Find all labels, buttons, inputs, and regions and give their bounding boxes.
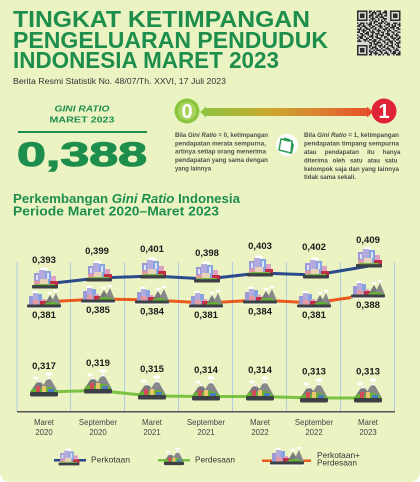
legend item: perdesaan: Perdesaan xyxy=(195,456,235,464)
text block: gini ratio = 0: yang lainnya xyxy=(175,166,212,172)
values: perdesaan: 0,314 xyxy=(194,365,219,376)
arrow: gradient scale xyxy=(200,106,373,118)
text block: gini ratio = 1: tidak sama sekali. xyxy=(304,174,356,181)
x axis labels: September xyxy=(79,418,117,427)
x axis labels: 2021 xyxy=(197,428,215,437)
values: perkotaan: 0,409 xyxy=(356,235,380,246)
text block: gini ratio = 1: diterima oleh satu atau satu xyxy=(304,158,398,164)
icons: perkotaan markers xyxy=(32,246,382,288)
label: gini ratio period: GINI RATIO xyxy=(54,104,110,114)
x axis labels: Maret xyxy=(358,418,379,427)
panel: gini scale 0 to 1 xyxy=(174,98,396,124)
series line: perdesaan xyxy=(44,390,368,398)
values: perdesaan: 0,313 xyxy=(356,366,380,378)
values: perkotaan: 0,393 xyxy=(32,255,56,266)
legend item: perkotaan + perdesaan: Perdesaan xyxy=(317,458,357,468)
x axis labels: 2022 xyxy=(251,428,269,437)
value: gini ratio 0,388: 0,388 xyxy=(17,136,147,174)
title: PENGELUARAN PENDUDUK xyxy=(13,27,328,53)
x axis labels: September xyxy=(187,418,225,427)
chart: gini ratio trend xyxy=(17,235,395,437)
text block: gini ratio = 0: pendapatan merata sempurna, xyxy=(175,140,266,148)
values: perkotaan: 0,399 xyxy=(85,246,109,257)
values: perkotaan: 0,401 xyxy=(140,244,165,255)
text block: gini ratio = 1: atau pendapatan itu hanya xyxy=(304,149,401,156)
icon: circle 1 xyxy=(372,98,396,124)
x axis labels: Maret xyxy=(142,418,163,427)
legend item: perdesaan xyxy=(158,448,235,465)
values: perdesaan xyxy=(32,358,380,378)
values: perkotaan + perdesaan: 0,381 xyxy=(32,310,57,321)
legend item: perkotaan + perdesaan: Perkotaan+ xyxy=(317,451,360,460)
values: perdesaan: 0,313 xyxy=(302,366,326,378)
text block: gini ratio = 0: Bila Gini Ratio = 0, ketimpangan xyxy=(175,132,268,139)
x axis labels: Maret xyxy=(34,418,55,427)
values: perkotaan: 0,403 xyxy=(248,241,272,252)
x axis labels: 2020 xyxy=(89,428,107,437)
legend item: perkotaan: Perkotaan xyxy=(91,456,130,464)
title xyxy=(13,6,328,73)
values: perdesaan: 0,315 xyxy=(140,364,165,375)
x axis labels: 2020 xyxy=(35,428,53,437)
legend item: perkotaan + perdesaan xyxy=(262,447,360,468)
panel: gini ratio headline xyxy=(17,104,147,174)
series line: perkotaan + perdesaan xyxy=(44,295,368,303)
text block: gini ratio = 0: artinya setiap orang menerima xyxy=(175,148,267,156)
icon: circle 1: 1 xyxy=(378,101,390,123)
icons: perdesaan markers xyxy=(30,369,382,402)
heading: chart title: Perkembangan Gini Ratio Indonesia xyxy=(13,192,241,206)
label: gini ratio period: MARET 2023 xyxy=(50,114,115,124)
values: perkotaan + perdesaan: 0,384 xyxy=(140,306,165,318)
values: perkotaan + perdesaan: 0,381 xyxy=(194,310,219,321)
icon: circle 0 xyxy=(174,98,200,124)
x axis labels: Maret xyxy=(250,418,271,427)
icon: clipboard xyxy=(276,134,298,156)
values: perkotaan: 0,402 xyxy=(302,242,326,253)
values: perkotaan + perdesaan: 0,381 xyxy=(302,310,327,321)
values: perkotaan: 0,398 xyxy=(195,248,219,259)
icon: QR code xyxy=(357,10,400,56)
values: perdesaan: 0,319 xyxy=(86,358,110,369)
text block: gini ratio = 1: kelompok saja dan yang lainnya xyxy=(304,166,400,173)
text block: gini ratio = 1: Bila Gini Ratio = 1, ketimpangan xyxy=(304,132,398,139)
values: perkotaan + perdesaan: 0,385 xyxy=(86,305,111,316)
text block: gini ratio = 0: pendapatan yang sama dengan xyxy=(175,157,268,164)
legend item: perkotaan xyxy=(54,448,130,465)
x axis labels: 2021 xyxy=(143,428,161,437)
icons: perkotaan + perdesaan markers xyxy=(27,280,385,308)
heading: chart title xyxy=(13,192,241,218)
values: perkotaan xyxy=(32,235,380,266)
x axis labels: September xyxy=(295,418,333,427)
x axis labels: 2022 xyxy=(305,428,323,437)
heading: chart title: Periode Maret 2020–Maret 2023 xyxy=(13,204,219,218)
subtitle: publication reference: Berita Resmi Statistik No. 48/07/Th. XXVI, 17 Juli 2023 xyxy=(13,77,226,86)
text block: gini ratio = 1: pendapatan timpang sempurna xyxy=(304,140,400,148)
icon: circle 0: 0 xyxy=(181,101,193,123)
x axis labels xyxy=(34,418,379,437)
title: INDONESIA MARET 2023 xyxy=(13,47,279,73)
x axis labels: 2023 xyxy=(359,428,377,437)
values: perkotaan + perdesaan: 0,384 xyxy=(248,306,273,318)
values: perdesaan: 0,314 xyxy=(248,365,273,376)
series line: perkotaan xyxy=(45,266,369,284)
label: gini ratio period xyxy=(50,104,115,124)
values: perdesaan: 0,317 xyxy=(32,361,56,372)
values: perkotaan + perdesaan: 0,388 xyxy=(356,300,380,311)
title: TINGKAT KETIMPANGAN xyxy=(13,6,310,32)
legend xyxy=(54,447,360,468)
values: perkotaan + perdesaan xyxy=(32,300,380,321)
